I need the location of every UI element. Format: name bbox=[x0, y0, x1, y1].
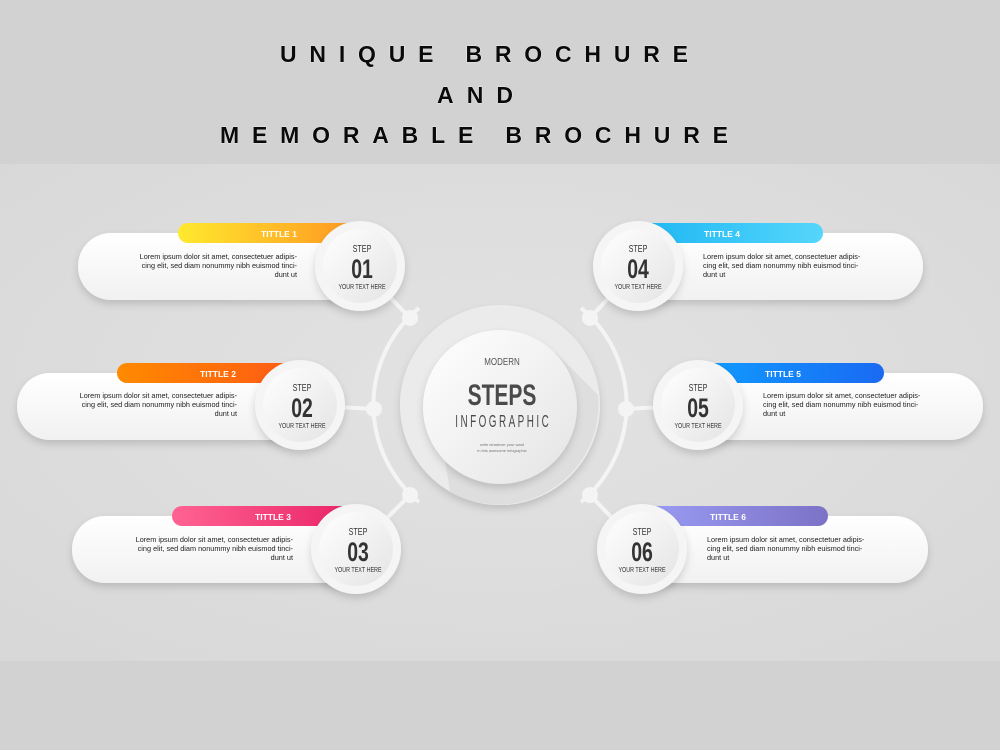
step 1: cing elit, sed diam nonummy nibh euismod tinci- bbox=[142, 261, 298, 270]
step 5: Lorem ipsum dolor sit amet, consectetuer adipis- bbox=[763, 391, 921, 400]
step 3: cing elit, sed diam nonummy nibh euismod tinci- bbox=[138, 544, 294, 553]
center circle: write whatever your want bbox=[480, 442, 525, 447]
step 2: TITTLE 2 bbox=[200, 369, 236, 379]
step 3: dunt ut bbox=[271, 553, 293, 562]
step 5 bbox=[653, 360, 983, 450]
center circle: in this awesome infographic bbox=[477, 448, 527, 453]
title bbox=[220, 41, 728, 148]
step 1: TITTLE 1 bbox=[261, 229, 297, 239]
step 6: Lorem ipsum dolor sit amet, consectetuer adipis- bbox=[707, 535, 865, 544]
step 4: dunt ut bbox=[703, 270, 725, 279]
step 1: dunt ut bbox=[275, 270, 297, 279]
connectors bbox=[300, 266, 698, 549]
center circle: MODERN bbox=[484, 356, 520, 367]
step 2: STEP bbox=[293, 382, 312, 393]
step 1: Lorem ipsum dolor sit amet, consectetuer adipis- bbox=[140, 252, 298, 261]
step 2: dunt ut bbox=[215, 409, 237, 418]
step 4: STEP bbox=[629, 243, 648, 254]
step 4: TITTLE 4 bbox=[704, 229, 740, 239]
step 6 bbox=[597, 504, 928, 594]
title: UNIQUE BROCHURE bbox=[280, 41, 688, 67]
step 1: STEP bbox=[353, 243, 372, 254]
title: AND bbox=[437, 82, 513, 108]
step 5: STEP bbox=[689, 382, 708, 393]
step 5: TITTLE 5 bbox=[765, 369, 801, 379]
step 6: cing elit, sed diam nonummy nibh euismod tinci- bbox=[707, 544, 863, 553]
step 6: STEP bbox=[633, 526, 652, 537]
step 4: YOUR TEXT HERE bbox=[614, 283, 662, 291]
step 4: 04 bbox=[627, 254, 649, 284]
title: MEMORABLE BROCHURE bbox=[220, 122, 728, 148]
step 3: STEP bbox=[349, 526, 368, 537]
step 6: TITTLE 6 bbox=[710, 512, 746, 522]
step 4: cing elit, sed diam nonummy nibh euismod tinci- bbox=[703, 261, 859, 270]
step 1: YOUR TEXT HERE bbox=[338, 283, 386, 291]
center circle: STEPS bbox=[468, 380, 536, 412]
step 3: YOUR TEXT HERE bbox=[334, 566, 382, 574]
step 2 bbox=[17, 360, 345, 450]
step 5: dunt ut bbox=[763, 409, 785, 418]
step 6: 06 bbox=[631, 537, 653, 567]
step 4 bbox=[593, 221, 923, 311]
step 2: cing elit, sed diam nonummy nibh euismod tinci- bbox=[82, 400, 238, 409]
step 5: 05 bbox=[687, 393, 709, 423]
step 2: YOUR TEXT HERE bbox=[278, 422, 326, 430]
background panel bbox=[0, 164, 1000, 661]
step 4: Lorem ipsum dolor sit amet, consectetuer adipis- bbox=[703, 252, 861, 261]
step 3: TITTLE 3 bbox=[255, 512, 291, 522]
step 3: 03 bbox=[347, 537, 369, 567]
step 6: dunt ut bbox=[707, 553, 729, 562]
center circle bbox=[400, 305, 600, 505]
center circle: INFOGRAPHIC bbox=[455, 412, 549, 432]
step 5: YOUR TEXT HERE bbox=[674, 422, 722, 430]
step 5: cing elit, sed diam nonummy nibh euismod tinci- bbox=[763, 400, 919, 409]
step 2: Lorem ipsum dolor sit amet, consectetuer adipis- bbox=[80, 391, 238, 400]
step 1: 01 bbox=[351, 254, 373, 284]
step 6: YOUR TEXT HERE bbox=[618, 566, 666, 574]
step 1 bbox=[78, 221, 405, 311]
step 3 bbox=[72, 504, 401, 594]
step 3: Lorem ipsum dolor sit amet, consectetuer adipis- bbox=[136, 535, 294, 544]
step 2: 02 bbox=[291, 393, 313, 423]
